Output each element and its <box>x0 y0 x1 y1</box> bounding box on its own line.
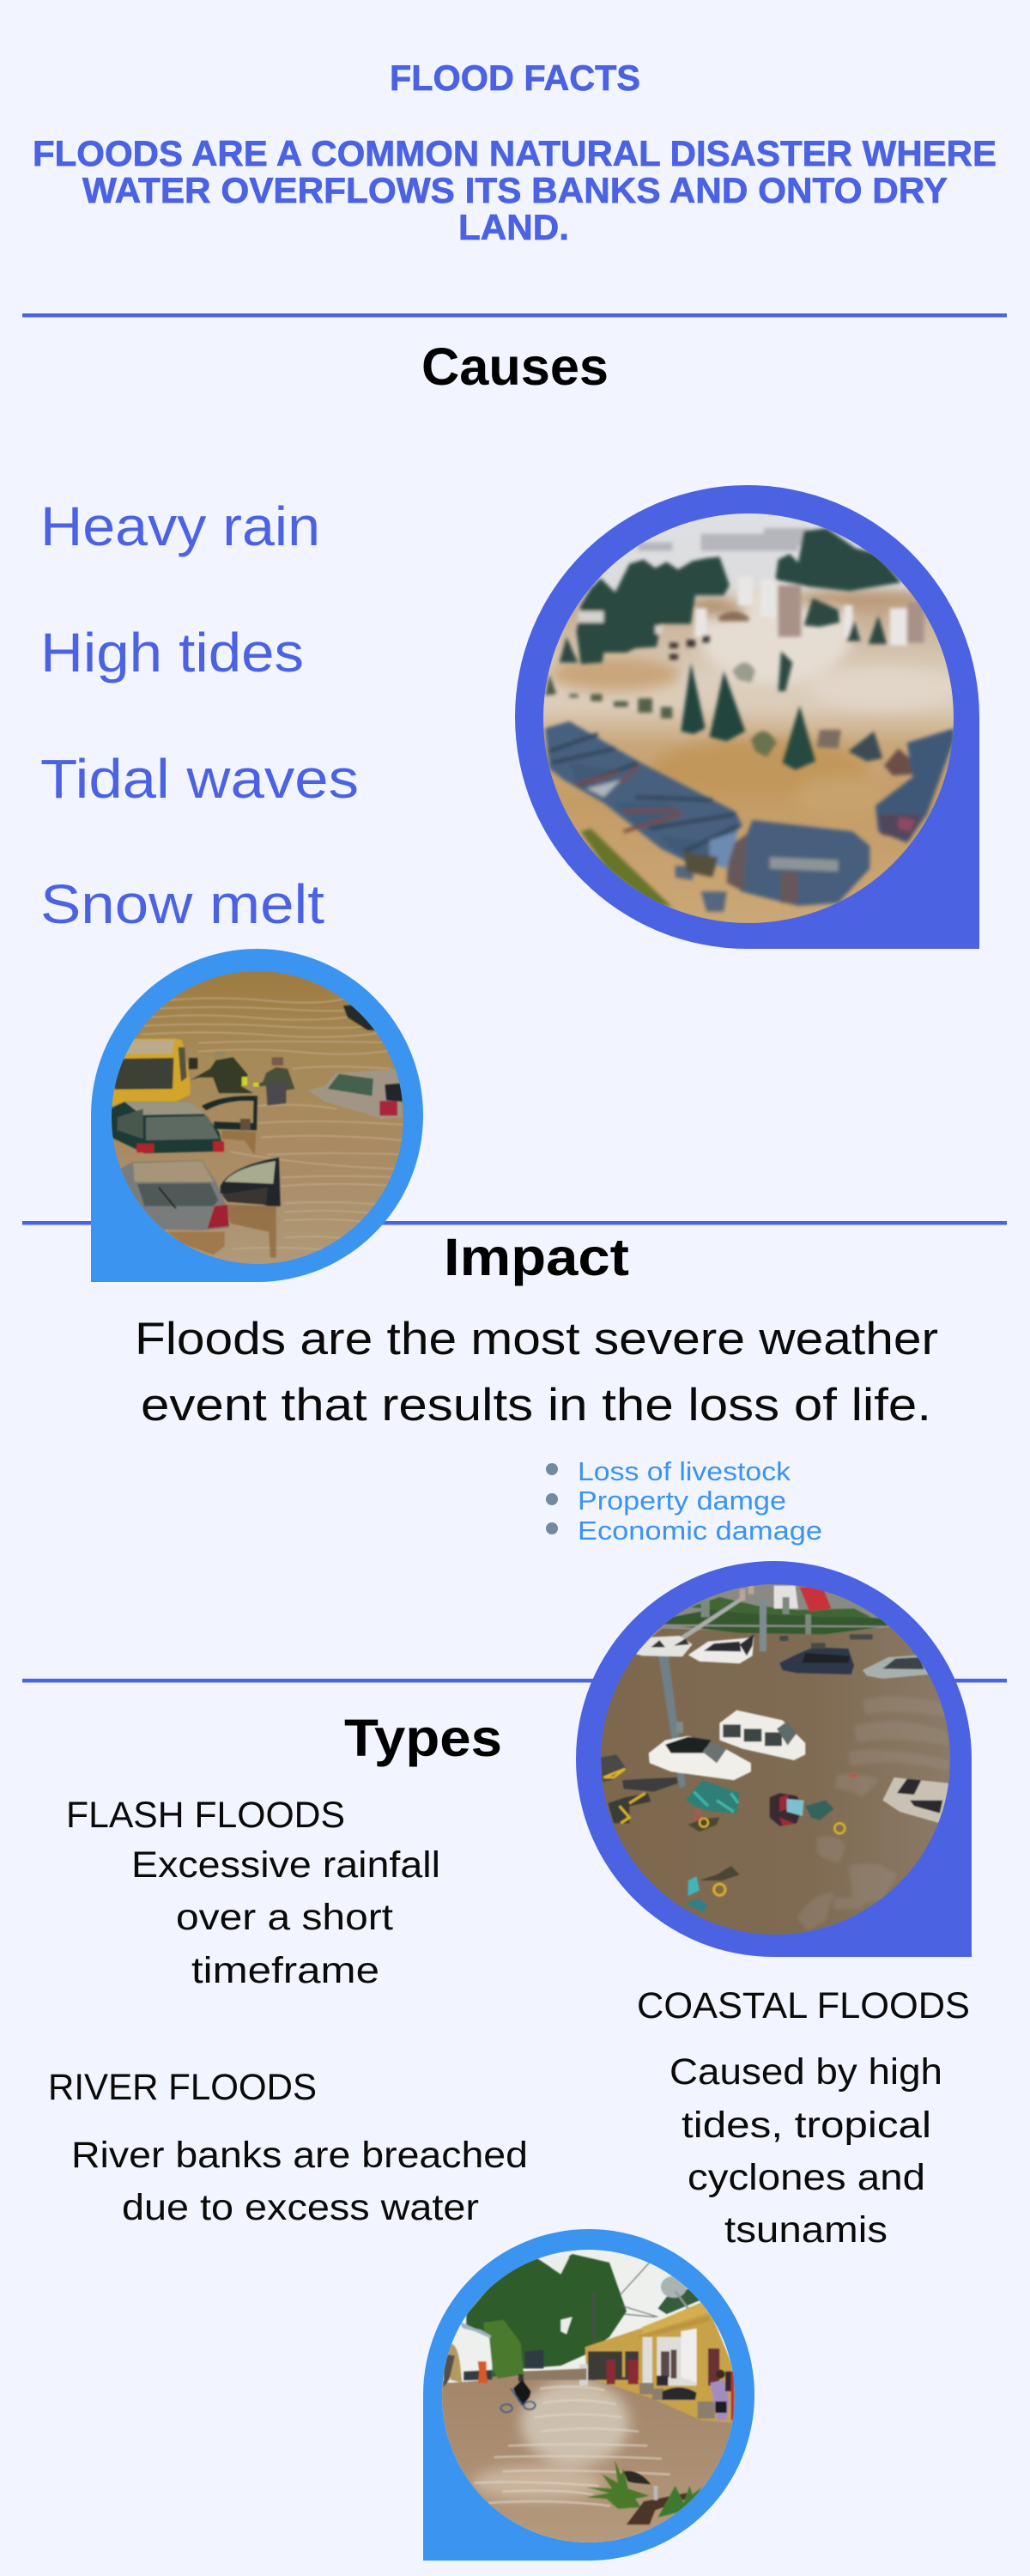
type: flash floods: FLASH FLOODS <box>66 1795 345 1836</box>
pin frame: flooded street <box>576 1561 972 1957</box>
type: flash floods: timeframe <box>191 1950 379 1991</box>
type: coastal floods: tsunamis <box>724 2209 888 2251</box>
heading: types: Types <box>344 1709 502 1767</box>
panel: causes <box>40 337 609 935</box>
pin frame: rescuers <box>91 949 423 1282</box>
subtitle: flood definition: FLOODS ARE A COMMON NATURAL DISASTER WHERE <box>33 133 997 173</box>
photo: flooded neighbourhood aerial <box>541 511 959 927</box>
list: flood causes: Tidal waves <box>40 748 359 810</box>
bullet list: damage types: Loss of livestock <box>578 1456 791 1486</box>
list: flood causes: Snow melt <box>40 873 324 935</box>
bullet list: damage types: Economic damage <box>578 1516 822 1546</box>
statement: severity of floods: Floods are the most severe weather <box>135 1314 938 1364</box>
heading: causes: Causes <box>421 337 609 396</box>
panel: types <box>48 1709 970 2251</box>
type: river floods: RIVER FLOODS <box>48 2067 317 2108</box>
type: river floods <box>48 2067 528 2228</box>
statement: severity of floods <box>135 1314 938 1431</box>
photo: flooded village street <box>438 2245 738 2546</box>
subtitle: flood definition <box>33 133 997 247</box>
pin frame: flooded village <box>423 2229 754 2561</box>
type: coastal floods: cyclones and <box>688 2157 925 2198</box>
type: coastal floods: tides, tropical <box>682 2105 931 2146</box>
list: flood causes <box>40 495 359 935</box>
pin frame: flooded neighbourhood <box>515 485 979 949</box>
type: river floods: River banks are breached <box>71 2135 528 2176</box>
type: coastal floods: Caused by high <box>670 2051 942 2093</box>
type: flash floods: over a short <box>176 1897 393 1938</box>
type: coastal floods <box>637 1985 970 2251</box>
photo: rescuers among submerged cars <box>107 969 408 1269</box>
list: flood causes: High tides <box>40 622 304 683</box>
subtitle: flood definition: WATER OVERFLOWS ITS BANKS AND ONTO DRY <box>82 170 948 210</box>
panel: impact <box>135 1228 938 1546</box>
type: flash floods <box>66 1795 440 1991</box>
type: flash floods: Excessive rainfall <box>131 1844 440 1886</box>
photo: flooded street with cars and bikes <box>597 1580 953 1936</box>
subtitle: flood definition: LAND. <box>458 207 569 247</box>
bullet list: damage types: Property damge <box>578 1485 786 1516</box>
list: flood causes: Heavy rain <box>40 495 320 557</box>
title block <box>33 58 997 247</box>
type: river floods: due to excess water <box>122 2187 479 2228</box>
bullet list: damage types <box>546 1456 822 1546</box>
title: Flood Facts: FLOOD FACTS <box>390 58 640 98</box>
type: coastal floods: COASTAL FLOODS <box>637 1985 970 2026</box>
heading: impact: Impact <box>444 1228 629 1286</box>
statement: severity of floods: event that results in the loss of life. <box>141 1380 931 1431</box>
